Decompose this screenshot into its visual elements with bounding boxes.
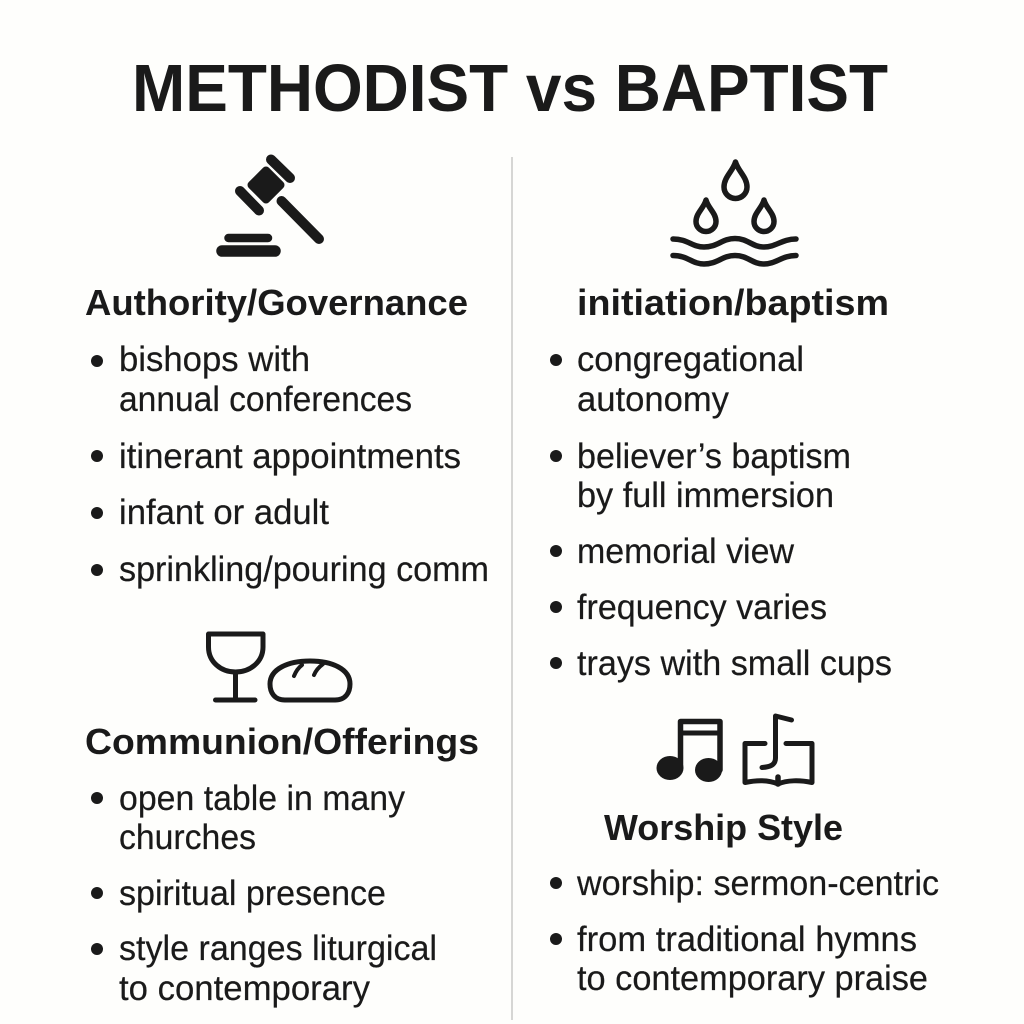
bullet: memorial view: memorial view (577, 532, 795, 571)
icon: music notes and hymn book (656, 716, 812, 784)
bullet: style ranges (91, 929, 437, 1008)
heading: Worship Style: Worship Style (604, 807, 843, 848)
bullet: congregational autonomy: congregational (577, 340, 804, 379)
bullet list: worship (550, 864, 939, 998)
bullet: hymns to praise (550, 920, 928, 998)
bullet: hymns to praise: to contemporary praise (577, 959, 928, 998)
bullet: spiritual presence: spiritual presence (119, 874, 386, 913)
bullet: sermon-centric: worship: sermon-centric (576, 864, 939, 903)
bullet: itinerant: itinerant appointments (119, 437, 461, 476)
bullet: bishops: annual conferences (119, 380, 412, 419)
bullet: trays: trays with small cups (577, 644, 892, 683)
bullet: infant: infant or adult (119, 493, 329, 532)
bullet list: authority (91, 340, 489, 589)
bullet: congregational autonomy: autonomy (577, 380, 729, 419)
panel: initiation/baptism (550, 162, 892, 683)
bullet: bishops: bishops with (119, 340, 310, 379)
bullet: open table: open table in many (119, 779, 405, 818)
bullet: bishops (91, 340, 412, 419)
bullet: believer's baptism: believer’s baptism (577, 437, 851, 476)
icon: gavel (222, 160, 319, 251)
bullet: style ranges: to contemporary (119, 969, 370, 1008)
bullet: open table: churches (119, 818, 256, 857)
panel: worship style (550, 716, 939, 998)
heading: Authority/Governance: Authority/Governance (85, 282, 468, 323)
bullet: congregational autonomy (550, 340, 804, 419)
bullet list: baptism (550, 340, 892, 683)
bullet: frequency varies: frequency varies (577, 588, 827, 627)
panel: authority/governance (85, 160, 489, 589)
bullet: style ranges: style ranges liturgical (119, 929, 437, 968)
heading: Communion/Offerings: Communion/Offerings (85, 721, 479, 762)
icon: water drops and waves (673, 162, 796, 264)
bullet: sprinkling: sprinkling/pouring comm (119, 550, 489, 589)
bullet: believer's baptism (550, 437, 851, 515)
bullet: open table (91, 779, 405, 857)
title: METHODIST vs BAPTIST (132, 51, 888, 126)
heading: initiation/baptism: initiation/baptism (577, 282, 889, 323)
panel: communion/offerings (85, 634, 479, 1008)
icon: cup and bread (208, 634, 350, 700)
bullet: hymns to praise: from traditional hymns (577, 920, 917, 959)
bullet list: communion (91, 779, 437, 1008)
bullet: believer's baptism: by full immersion (577, 476, 834, 515)
